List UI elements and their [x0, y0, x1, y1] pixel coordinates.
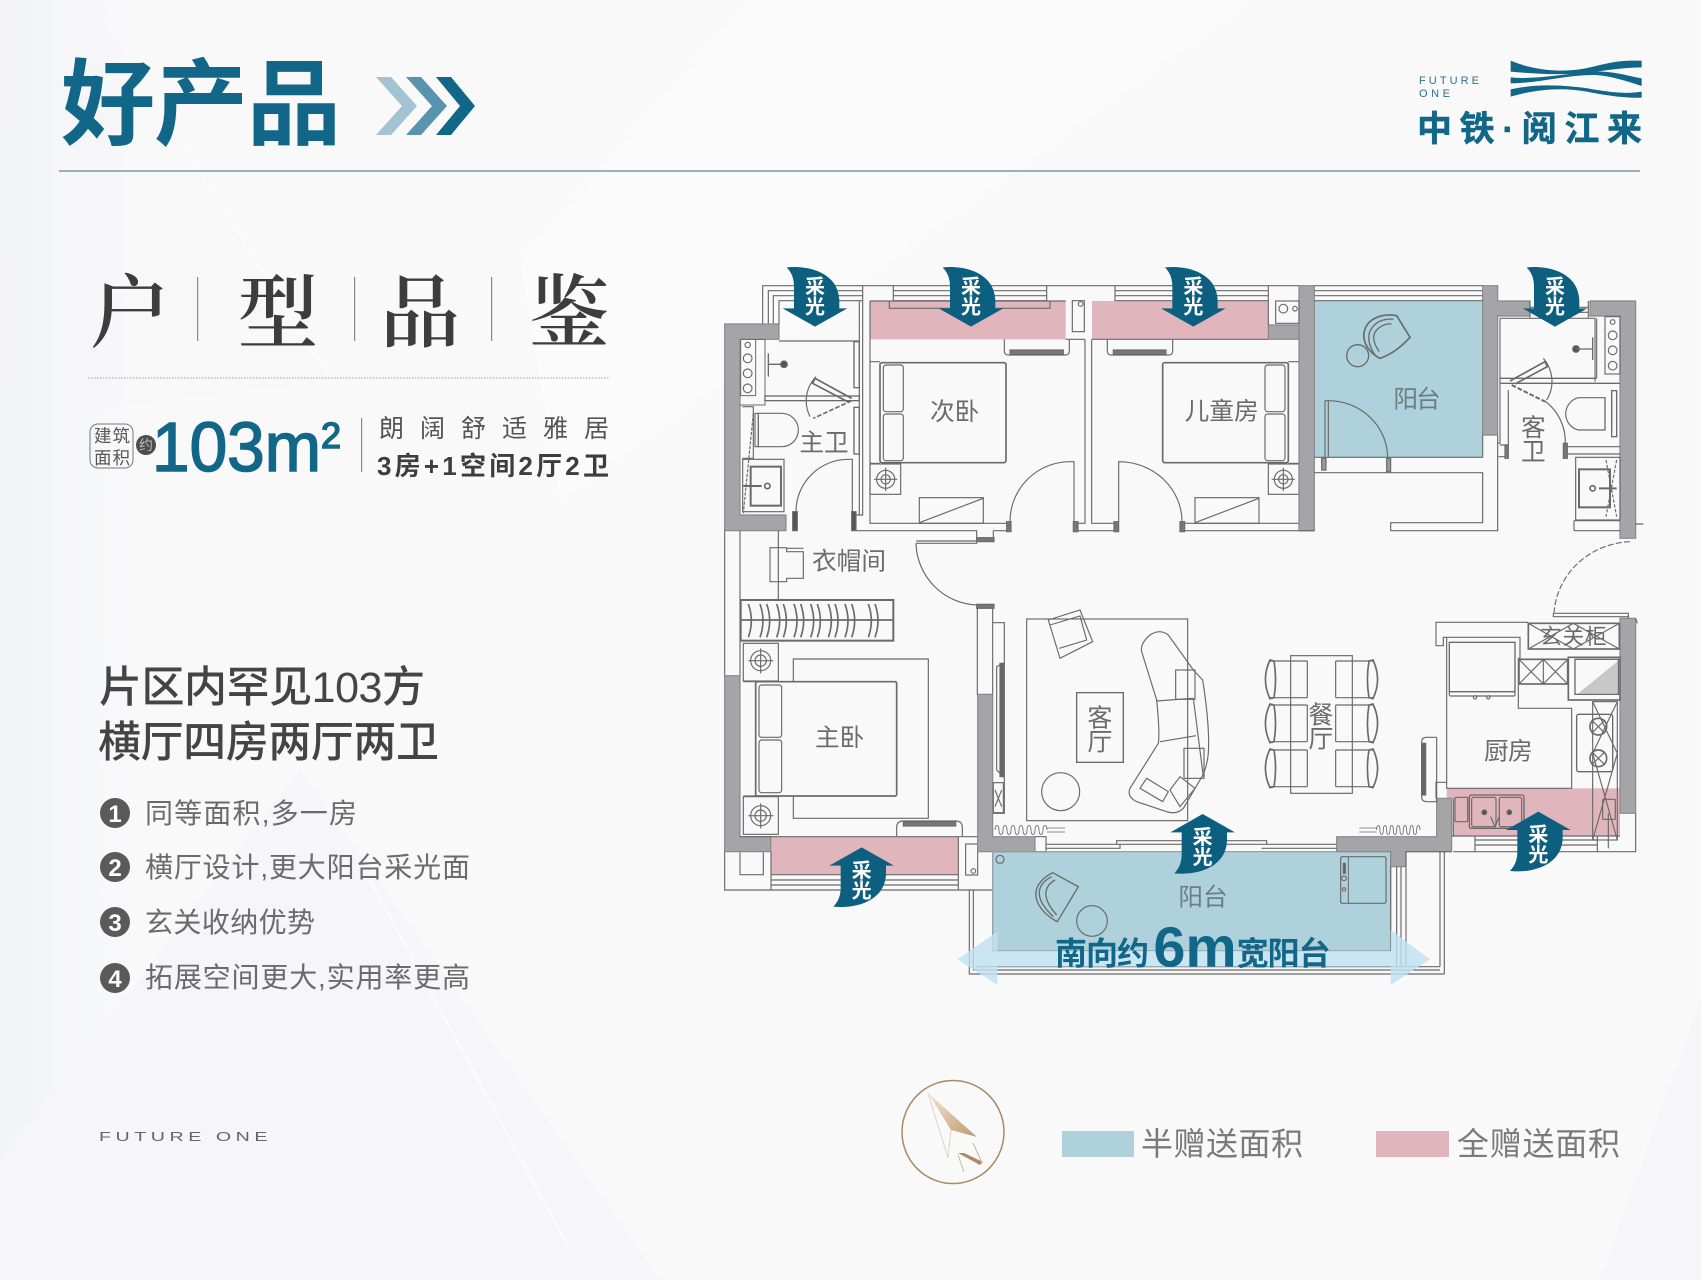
selling points list: 1: [108, 801, 122, 828]
icon: daylight arrow master bedroom: 采: [852, 859, 872, 882]
footer brand: FUTURE ONE: [99, 1129, 272, 1144]
icon: daylight arrow kitchen: 光: [1528, 844, 1548, 867]
headline text: 片区内罕见103方: [99, 664, 425, 712]
selling points list: 同等面积,多一房: [145, 798, 357, 829]
icon: daylight arrow bedroom 2: [939, 267, 1003, 327]
tagline: 朗阔舒适雅居: [379, 415, 609, 443]
icon: daylight arrow bedroom 2: 光: [961, 295, 981, 318]
heading: 户型品鉴: 型: [238, 271, 318, 359]
room: master bath, bedroom 2 and kids room upper-left: [725, 286, 1314, 575]
icon: triple chevron arrows: [376, 77, 475, 135]
logo: ONE: [1419, 88, 1450, 100]
icon: daylight arrow master bedroom: [829, 847, 894, 907]
selling points list: 拓展空间更大,实用率更高: [145, 962, 470, 993]
area number: 2: [321, 415, 341, 456]
room: master bedroom and living room: 台: [1203, 884, 1228, 912]
room: kids room: [1163, 362, 1299, 523]
room: dining, kitchen and laundry: [1200, 613, 1637, 974]
arrow: south balcony 6m double arrow: [957, 930, 1430, 985]
area number: 103m: [152, 408, 321, 486]
area badge: [90, 424, 156, 468]
icon: daylight arrow living room: 采: [1193, 826, 1213, 849]
icon: daylight arrow bedroom 2: 采: [961, 275, 981, 298]
selling points list: 3: [108, 910, 122, 937]
room: dining, kitchen and laundry: 餐: [1308, 701, 1333, 729]
header rule: [59, 170, 1640, 172]
room: walk-in closet: [725, 531, 1004, 813]
legend: 半赠送面积: [1141, 1126, 1303, 1162]
area badge: 约: [139, 437, 153, 453]
tagline: 3房+1空间2厅2卫: [377, 451, 609, 481]
floor plan: [725, 267, 1643, 985]
icon: daylight arrow bath: 光: [805, 295, 825, 318]
icon: daylight arrow bath: 采: [805, 275, 825, 298]
icon: daylight arrow kitchen: [1506, 812, 1571, 871]
icon: daylight arrow master bedroom: 光: [852, 879, 872, 902]
room: master bath, bedroom 2 and kids room upper-left: 次卧: [930, 398, 979, 426]
headline text: [98, 664, 439, 767]
logo: [1417, 61, 1642, 149]
room: master bath, bedroom 2 and kids room upper-left: 衣帽间: [812, 547, 886, 575]
heading: 户型品鉴: [90, 271, 609, 359]
room: master bath, bedroom 2 and kids room upper-left: 主卫: [799, 429, 849, 457]
logo: 中铁·阅江来: [1417, 110, 1642, 149]
heading: 户型品鉴: 品: [380, 271, 460, 359]
room: dining, kitchen and laundry: 厨房: [1484, 737, 1533, 765]
callout: south 6m balcony: 宽阳台: [1237, 935, 1331, 971]
heading: 户型品鉴: 鉴: [529, 271, 609, 359]
icon: daylight arrow guest bath: 采: [1545, 275, 1565, 298]
selling points list: 玄关收纳优势: [145, 907, 315, 938]
room: balcony north and guest bath: 客: [1521, 414, 1546, 442]
area badge: 面积: [94, 448, 130, 468]
icon: daylight arrow guest bath: 光: [1545, 295, 1565, 318]
icon: daylight arrow living room: 光: [1193, 846, 1213, 869]
heading: 户型品鉴: 户: [90, 271, 170, 359]
legend: 全赠送面积: [1457, 1126, 1620, 1162]
icon: daylight arrow bath: [783, 267, 847, 327]
room: balcony north and guest bath: 阳台: [1393, 386, 1441, 414]
compass: [902, 1080, 1004, 1184]
room: dining, kitchen and laundry: 玄关柜: [1540, 624, 1607, 649]
icon: daylight arrow kids room: 采: [1183, 275, 1203, 298]
room: balcony north and guest bath: 卫: [1521, 439, 1546, 466]
logo: FUTURE: [1419, 75, 1479, 87]
room: dining, kitchen and laundry: 厅: [1308, 725, 1333, 753]
icon: daylight arrow kitchen: 采: [1528, 824, 1548, 847]
selling points list: 横厅设计,更大阳台采光面: [145, 852, 470, 883]
room: master bedroom and living room: 主卧: [815, 724, 864, 752]
room: master bedroom and living room: 厅: [1087, 729, 1112, 757]
icon: daylight arrow guest bath: [1523, 267, 1587, 327]
legend: [1062, 1126, 1620, 1162]
icon: daylight arrow kids room: 光: [1183, 295, 1203, 318]
callout: south 6m balcony: [1055, 917, 1331, 980]
zones: gift area fills: [771, 301, 1620, 951]
room: master bedroom and living room: 阳: [1178, 885, 1203, 912]
callout: south 6m balcony: 南向约: [1055, 935, 1149, 971]
area badge: 建筑: [94, 426, 130, 446]
room: master bedroom and living room: [725, 610, 1444, 974]
headline text: 横厅四房两厅两卫: [98, 719, 439, 767]
room: master bedroom and living room: 客: [1087, 705, 1112, 733]
callout: south 6m balcony: 6m: [1153, 917, 1237, 980]
selling points list: [100, 798, 470, 993]
tagline: [377, 415, 609, 481]
room: balcony north and guest bath: [1268, 286, 1643, 620]
selling points list: 2: [108, 855, 122, 882]
icon: daylight arrow kids room: [1161, 267, 1226, 327]
title: 好产品: [61, 52, 341, 157]
room: kids room: 儿童房: [1185, 397, 1259, 425]
icon: daylight arrow living room: [1170, 814, 1235, 874]
selling points list: 4: [108, 966, 122, 993]
